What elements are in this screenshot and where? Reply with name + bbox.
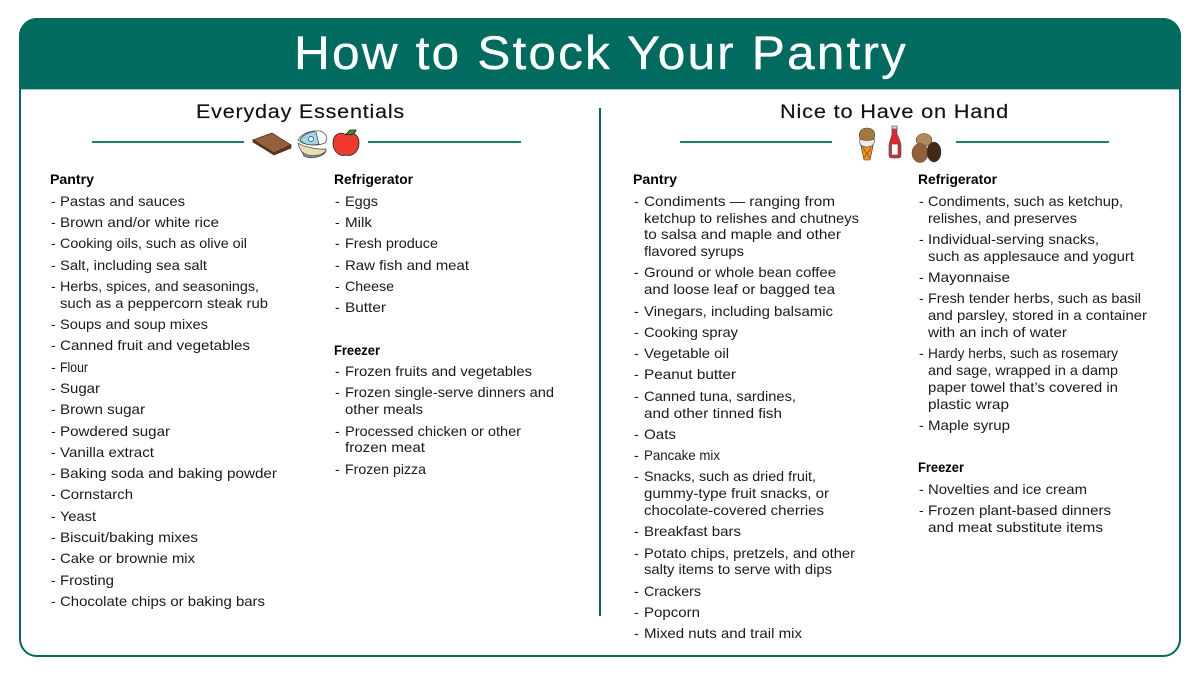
list: nice pantry: -	[634, 447, 639, 463]
list: everyday freezer: other meals	[345, 401, 423, 417]
heading rule left	[92, 141, 244, 143]
list: nice pantry: Breakfast bars	[644, 523, 741, 539]
list: nice pantry: Canned tuna, sardines,	[644, 388, 796, 404]
list: nice pantry: -	[634, 625, 639, 641]
list: everyday pantry: Herbs, spices, and seasonings,	[60, 278, 259, 294]
heading: everyday essentials: Everyday Essentials	[196, 102, 405, 123]
list: everyday pantry: -	[51, 401, 56, 417]
list: everyday freezer: -	[335, 384, 340, 400]
list: nice pantry: -	[634, 303, 639, 319]
list: nice refrigerator: relishes, and preserves	[928, 210, 1077, 226]
panel: nice to have on hand	[633, 102, 1147, 641]
list: everyday pantry: Salt, including sea salt	[60, 257, 207, 273]
list: everyday pantry: -	[51, 359, 56, 375]
panel: everyday essentials	[50, 102, 554, 609]
list: everyday pantry: -	[51, 257, 56, 273]
list: everyday pantry: -	[51, 193, 56, 209]
icon: oyster	[298, 131, 327, 158]
centre divider	[599, 108, 601, 616]
list: nice freezer: Frozen plant-based dinners	[928, 502, 1111, 518]
list: nice refrigerator: -	[919, 269, 924, 285]
list: nice pantry: and other tinned fish	[644, 405, 782, 421]
list: everyday pantry: -	[51, 214, 56, 230]
list: everyday pantry: Chocolate chips or baking bars	[60, 593, 265, 609]
heading: nice to have on hand: Nice to Have on Hand	[780, 102, 1009, 123]
list: everyday pantry	[50, 171, 277, 609]
list: nice refrigerator: Condiments, such as ketchup,	[928, 193, 1123, 209]
list: nice refrigerator: Maple syrup	[928, 417, 1010, 433]
list: nice refrigerator: -	[919, 290, 924, 306]
list: nice pantry: Vegetable oil	[644, 345, 729, 361]
icon: apple	[333, 130, 359, 155]
list: everyday pantry: Biscuit/baking mixes	[60, 529, 198, 545]
list: everyday pantry: -	[51, 593, 56, 609]
icon: graham cracker	[253, 133, 291, 155]
list: nice refrigerator: such as applesauce and yogurt	[928, 248, 1134, 264]
list: nice pantry: Pancake mix	[644, 447, 720, 463]
list: everyday freezer: Processed chicken or other	[345, 423, 521, 439]
list: everyday pantry: -	[51, 465, 56, 481]
list: nice pantry: -	[634, 193, 639, 209]
list: nice freezer: and meat substitute items	[928, 519, 1103, 535]
list: everyday pantry: -	[51, 278, 56, 294]
list: everyday pantry: Flour	[60, 359, 88, 375]
list: everyday refrigerator: -	[335, 299, 340, 315]
list: everyday pantry: Yeast	[60, 508, 96, 524]
subheading: refrigerator: Refrigerator	[334, 171, 414, 187]
list: nice pantry: -	[634, 604, 639, 620]
list: nice pantry: Snacks, such as dried fruit,	[644, 468, 816, 484]
icon: ice cream cone	[859, 128, 875, 160]
list: nice refrigerator: paper towel that’s covered in	[928, 379, 1118, 395]
heading rule left	[680, 141, 832, 143]
list: everyday freezer: -	[335, 461, 340, 477]
icon: coffee beans	[912, 134, 941, 162]
list: everyday pantry: Sugar	[60, 380, 100, 396]
list: everyday freezer: Frozen pizza	[345, 461, 426, 477]
list: everyday pantry: Vanilla extract	[60, 444, 154, 460]
list: everyday pantry: Cake or brownie mix	[60, 550, 195, 566]
subheading: pantry: Pantry	[633, 171, 677, 187]
list: everyday refrigerator: -	[335, 235, 340, 251]
subheading: freezer: Freezer	[334, 342, 381, 358]
list: nice refrigerator: Hardy herbs, such as rosemary	[928, 345, 1118, 361]
list: nice freezer: -	[919, 481, 924, 497]
list: nice pantry: -	[634, 264, 639, 280]
list: everyday pantry: -	[51, 444, 56, 460]
list: nice freezer	[918, 459, 1111, 535]
list: everyday freezer	[334, 342, 554, 477]
list: nice pantry: Oats	[644, 426, 676, 442]
list: everyday pantry: -	[51, 550, 56, 566]
list: nice pantry: flavored syrups	[644, 243, 744, 259]
list: nice pantry: Crackers	[644, 583, 701, 599]
list: everyday refrigerator: Raw fish and meat	[345, 257, 469, 273]
list: everyday pantry: -	[51, 380, 56, 396]
list: nice refrigerator	[918, 171, 1147, 433]
list: nice pantry: -	[634, 345, 639, 361]
list: nice pantry: Peanut butter	[644, 366, 736, 382]
title banner	[19, 18, 1181, 89]
list: nice pantry: gummy-type fruit snacks, or	[644, 485, 829, 501]
list: everyday pantry: Brown sugar	[60, 401, 145, 417]
subheading: pantry: Pantry	[50, 171, 94, 187]
list: everyday pantry: -	[51, 316, 56, 332]
list: nice pantry: ketchup to relishes and chutneys	[644, 210, 859, 226]
list: everyday pantry: Cooking oils, such as olive oil	[60, 235, 247, 251]
list: everyday refrigerator: Fresh produce	[345, 235, 438, 251]
list: everyday pantry: -	[51, 529, 56, 545]
list: nice pantry: -	[634, 324, 639, 340]
list: nice refrigerator: -	[919, 345, 924, 361]
list: nice pantry: -	[634, 583, 639, 599]
list: everyday refrigerator: Eggs	[345, 193, 378, 209]
list: everyday pantry: -	[51, 337, 56, 353]
list: nice pantry: -	[634, 545, 639, 561]
list: everyday pantry: Cornstarch	[60, 486, 133, 502]
list: everyday refrigerator	[334, 171, 469, 315]
list: nice pantry: salty items to serve with dips	[644, 561, 832, 577]
list: everyday pantry: Pastas and sauces	[60, 193, 185, 209]
list: everyday refrigerator: Milk	[345, 214, 373, 230]
list: nice pantry: -	[634, 388, 639, 404]
list: nice refrigerator: Individual-serving snacks,	[928, 231, 1099, 247]
list: everyday refrigerator: -	[335, 278, 340, 294]
list: everyday pantry: Brown and/or white rice	[60, 214, 219, 230]
list: nice refrigerator: Mayonnaise	[928, 269, 1010, 285]
list: nice pantry: chocolate-covered cherries	[644, 502, 824, 518]
list: everyday pantry: Soups and soup mixes	[60, 316, 208, 332]
list: everyday pantry: -	[51, 508, 56, 524]
list: nice pantry: to salsa and maple and other	[644, 226, 841, 242]
list: nice pantry: Ground or whole bean coffee	[644, 264, 836, 280]
list: nice pantry: -	[634, 468, 639, 484]
list: nice pantry: and loose leaf or bagged tea	[644, 281, 835, 297]
list: everyday pantry: Canned fruit and vegetables	[60, 337, 250, 353]
list: everyday refrigerator: -	[335, 214, 340, 230]
list: everyday refrigerator: Butter	[345, 299, 386, 315]
list: nice refrigerator: and parsley, stored in a container	[928, 307, 1147, 323]
list: everyday freezer: -	[335, 363, 340, 379]
list: everyday freezer: -	[335, 423, 340, 439]
list: nice pantry: -	[634, 426, 639, 442]
list: everyday freezer: frozen meat	[345, 439, 425, 455]
list: nice refrigerator: Fresh tender herbs, such as basil	[928, 290, 1141, 306]
list: nice pantry: Vinegars, including balsamic	[644, 303, 833, 319]
list: everyday pantry: -	[51, 572, 56, 588]
list: nice freezer: Novelties and ice cream	[928, 481, 1087, 497]
list: nice freezer: -	[919, 502, 924, 518]
list: nice refrigerator: -	[919, 231, 924, 247]
list: everyday pantry: -	[51, 423, 56, 439]
heading rule right	[956, 141, 1109, 143]
list: everyday freezer: Frozen single-serve dinners and	[345, 384, 554, 400]
list: everyday pantry: Baking soda and baking powder	[60, 465, 277, 481]
list: everyday pantry: -	[51, 486, 56, 502]
list: nice pantry: Condiments — ranging from	[644, 193, 835, 209]
list: everyday pantry: such as a peppercorn steak rub	[60, 295, 268, 311]
list: nice refrigerator: -	[919, 193, 924, 209]
list: nice pantry: Potato chips, pretzels, and other	[644, 545, 855, 561]
list: everyday pantry: Frosting	[60, 572, 114, 588]
subheading: refrigerator: Refrigerator	[918, 171, 998, 187]
list: nice refrigerator: plastic wrap	[928, 396, 1009, 412]
list: nice pantry: -	[634, 523, 639, 539]
list: everyday pantry: -	[51, 235, 56, 251]
title: How to Stock Your Pantry	[294, 26, 908, 79]
list: nice pantry: Cooking spray	[644, 324, 738, 340]
list: nice pantry: Popcorn	[644, 604, 700, 620]
list: nice refrigerator: and sage, wrapped in a damp	[928, 362, 1118, 378]
icon: ketchup bottle	[889, 126, 901, 158]
heading rule right	[368, 141, 521, 143]
list: everyday pantry: Powdered sugar	[60, 423, 170, 439]
list: everyday refrigerator: -	[335, 193, 340, 209]
list: nice refrigerator: with an inch of water	[927, 324, 1067, 340]
list: nice pantry: Mixed nuts and trail mix	[644, 625, 802, 641]
subheading: freezer: Freezer	[918, 459, 965, 475]
list: nice pantry: -	[634, 366, 639, 382]
list: everyday refrigerator: -	[335, 257, 340, 273]
list: everyday freezer: Frozen fruits and vegetables	[345, 363, 532, 379]
list: nice refrigerator: -	[919, 417, 924, 433]
list: everyday refrigerator: Cheese	[345, 278, 394, 294]
list: nice pantry	[633, 171, 859, 641]
